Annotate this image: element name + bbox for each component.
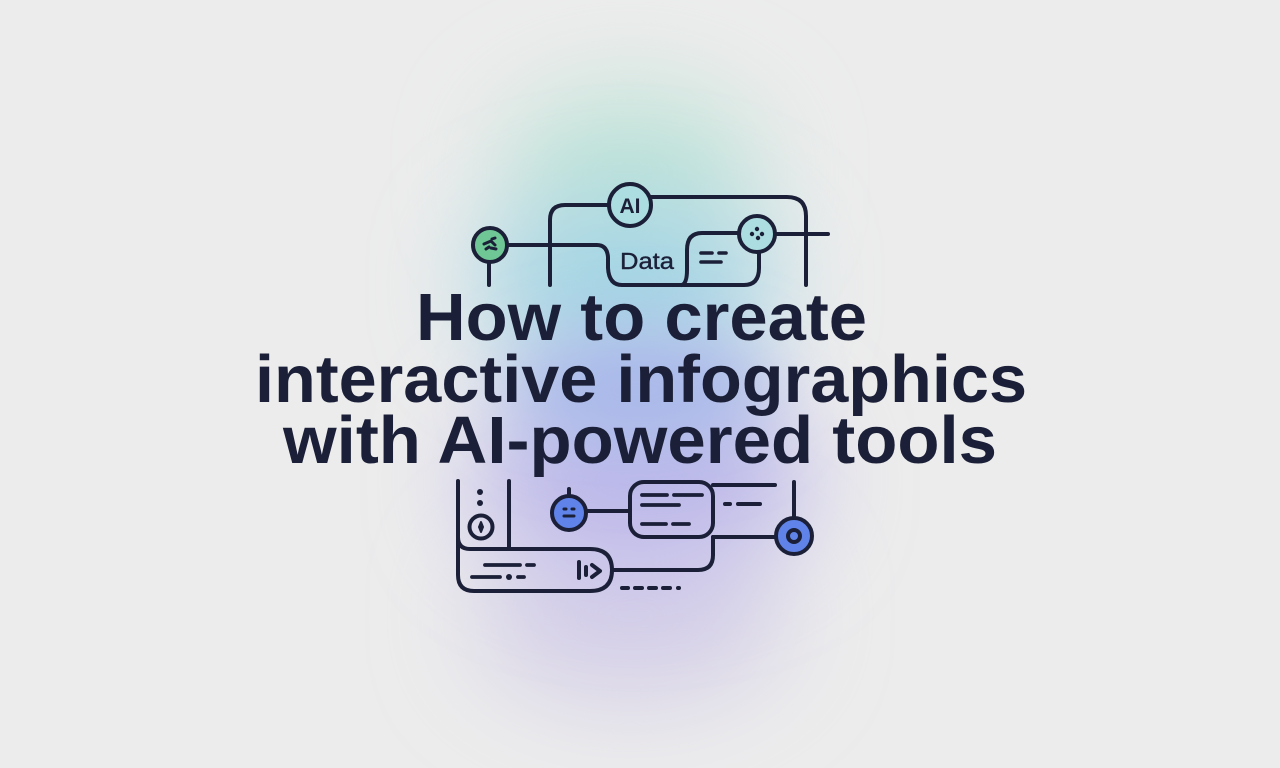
icon: AI node: AI [620, 195, 640, 218]
data text dashes [701, 253, 726, 262]
connector: face node to panel [586, 509, 630, 513]
title: interactive infographics [255, 342, 1027, 417]
connector: blue ring stem [792, 482, 796, 518]
icon: blue face node [552, 489, 586, 530]
text panel [630, 482, 713, 537]
pill box text dashes [472, 565, 534, 577]
gradient glow background [470, 90, 810, 705]
connector: panel to blue ring [713, 535, 776, 539]
connector: green node to data loop [507, 245, 759, 285]
sidebar dots [477, 489, 483, 506]
pill box dot [506, 574, 512, 580]
title: with AI-powered tools [282, 403, 997, 478]
icon: dots node [739, 216, 775, 252]
icon: play glyph [579, 562, 600, 578]
icon: AI node [609, 184, 651, 226]
sidebar right rail [507, 481, 511, 549]
connector: data box to dots node [682, 233, 739, 285]
bottom network diagram [458, 481, 812, 591]
dashed trail [622, 586, 679, 590]
icon: star circle [470, 516, 492, 538]
connector: panel top right [713, 483, 775, 487]
connector: green node stem [487, 263, 491, 285]
data label: Data [620, 248, 674, 274]
side dashes [725, 502, 760, 506]
connector: pill box to panel [612, 537, 713, 570]
panel text dashes [642, 495, 702, 524]
sidebar and pill box [458, 481, 612, 591]
title [255, 280, 1027, 478]
icon: green node [473, 228, 507, 262]
connector: left riser to AI node [550, 205, 609, 285]
title: How to create [416, 280, 867, 355]
connector: AI node to right riser [651, 197, 806, 285]
connector: dots node to right [776, 232, 828, 236]
icon: blue ring node [776, 518, 812, 554]
top network diagram [473, 184, 828, 285]
